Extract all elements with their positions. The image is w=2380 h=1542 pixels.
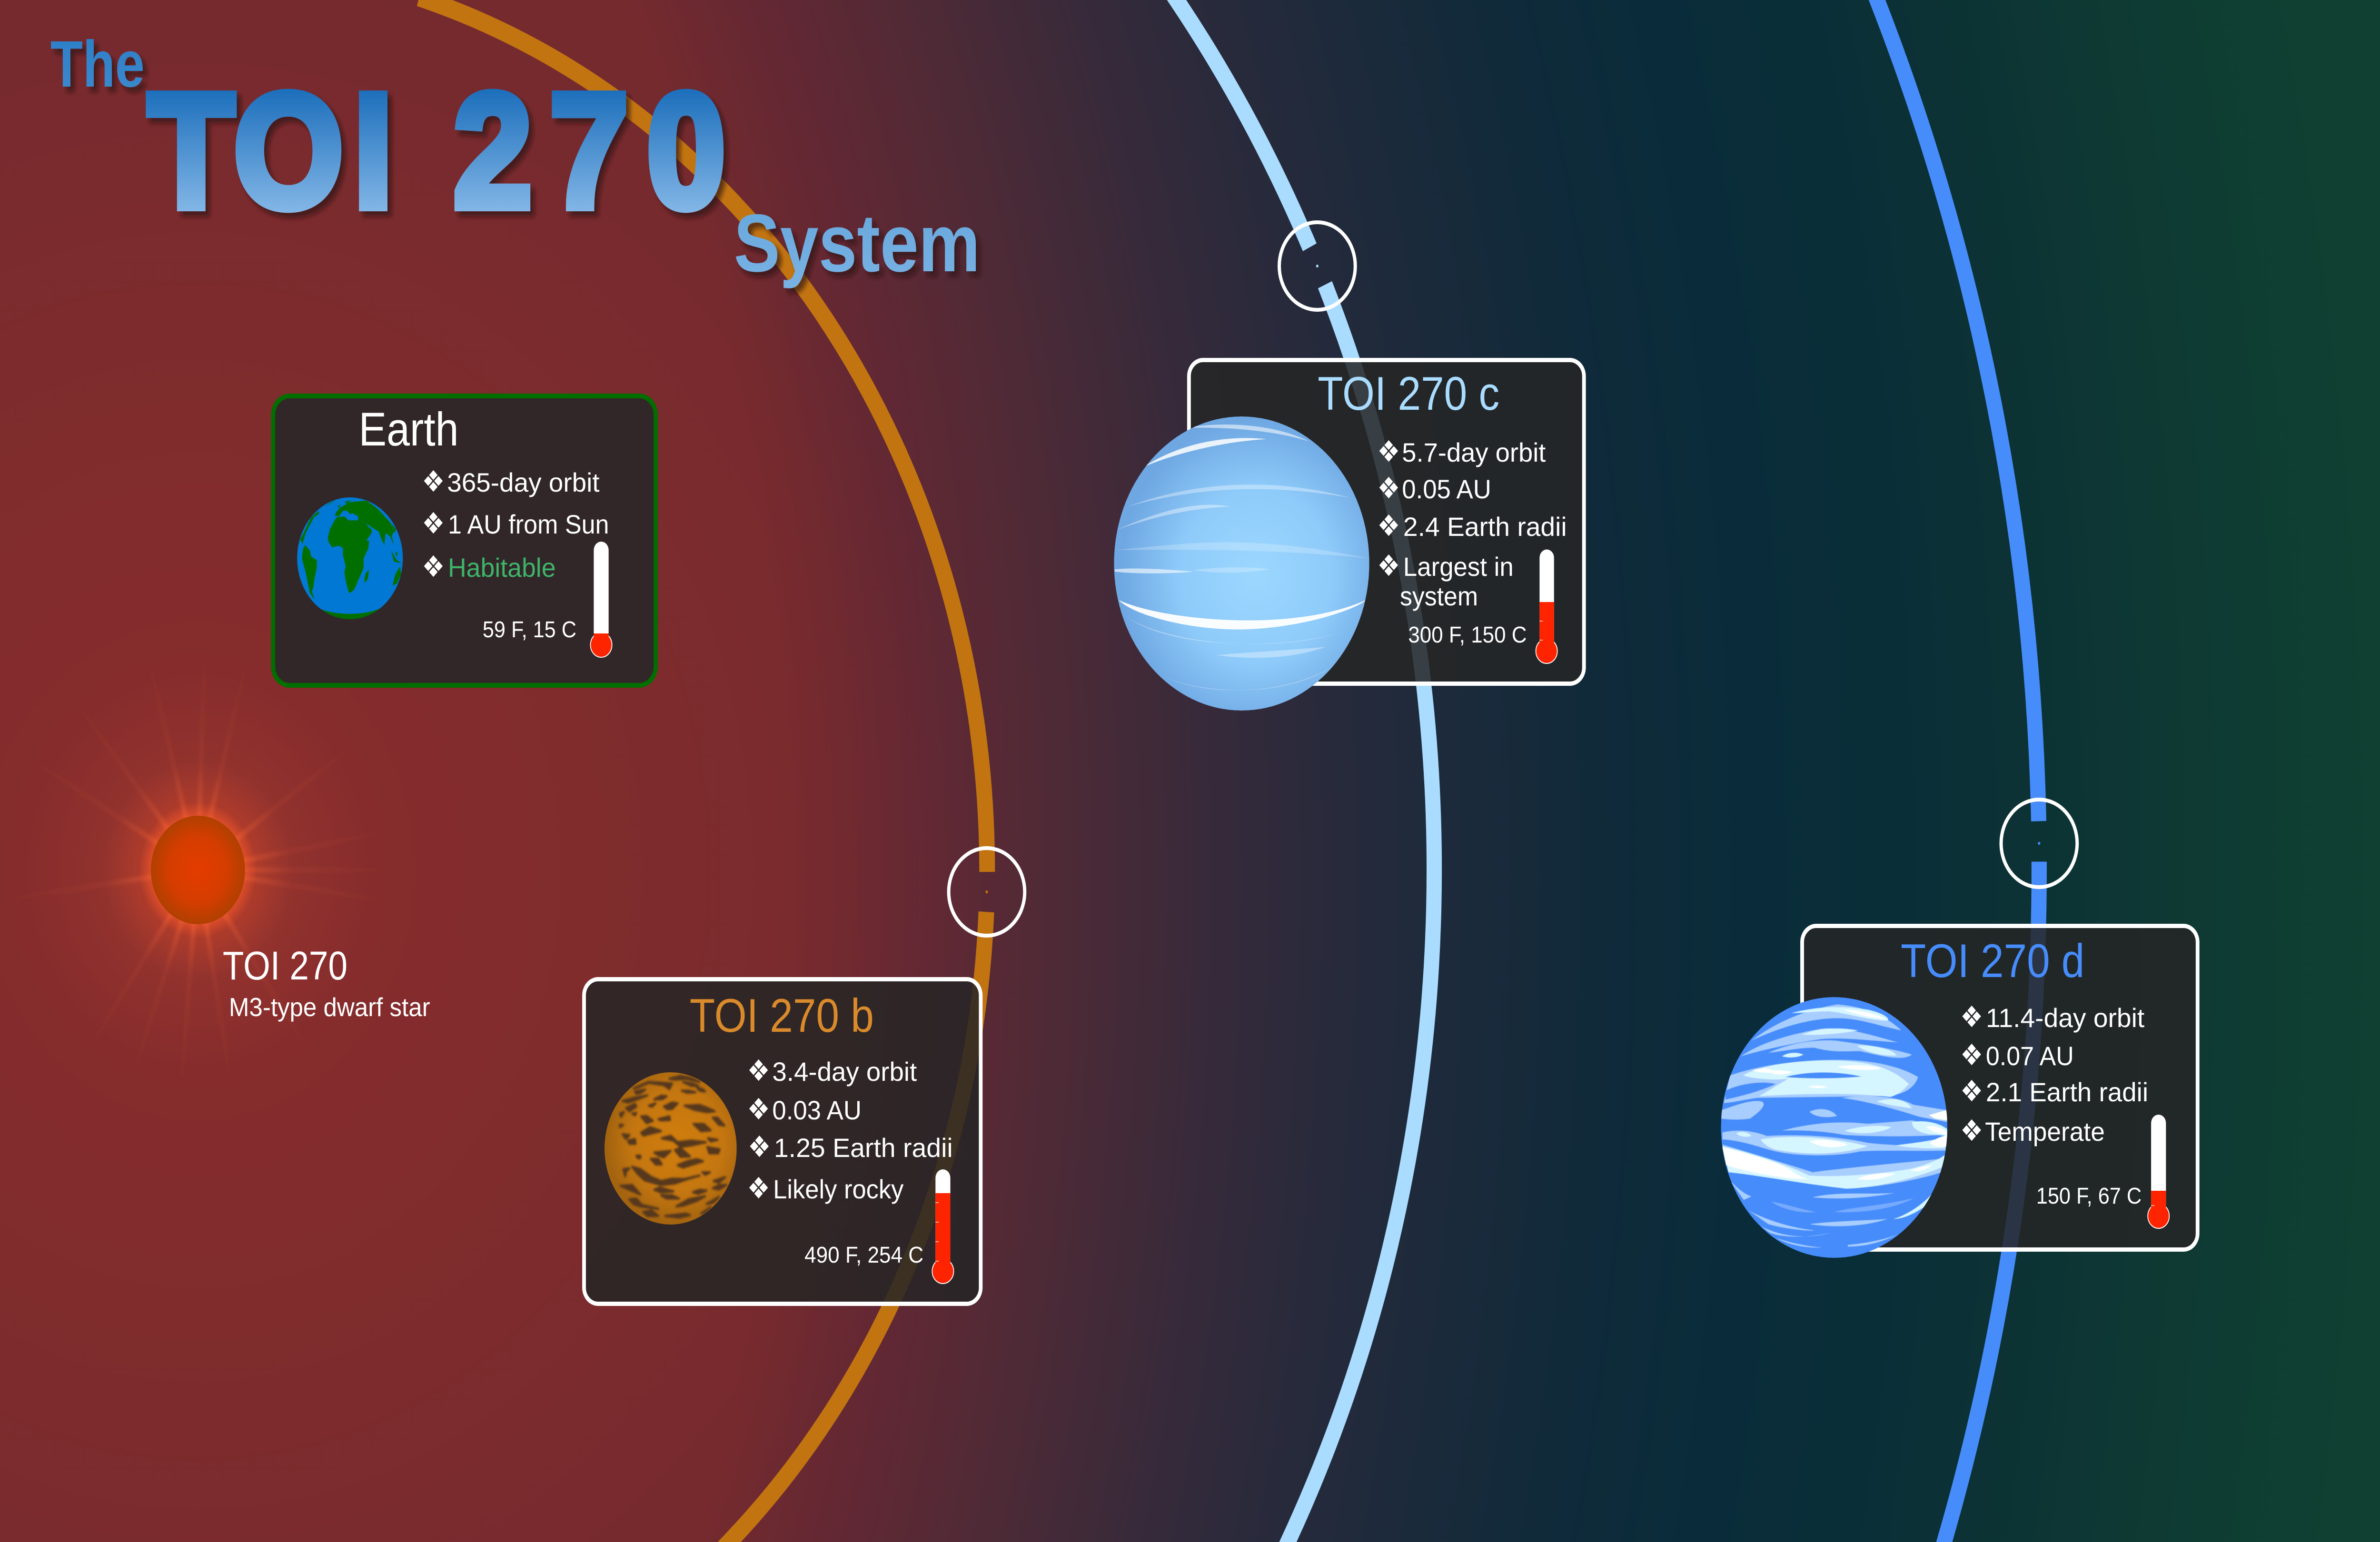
facts b: 1.25 Earth radii [774,1134,953,1163]
orbit: TOI 270 d [1877,0,2039,1542]
heading c: TOI 270 c [1318,367,1499,420]
facts b: ❖ [747,1092,770,1127]
planet b dark patches [620,1076,726,1217]
facts c: ❖ [1377,434,1400,469]
planet d surface [1721,997,1947,1258]
icon: thermometer c [1536,549,1557,663]
Earth card [273,396,656,685]
Earth facts: 365-day orbit [447,468,600,498]
facts d: Temperate [1985,1117,2105,1147]
facts c: Largest in [1403,553,1514,582]
star glow [24,670,371,1070]
icon: thermometer b [932,1169,953,1284]
facts d: ❖ [1960,1074,1983,1108]
star type: M3-type dwarf star [229,992,430,1022]
title [50,28,980,289]
facts c: 5.7-day orbit [1402,438,1546,468]
title word: System: System [734,198,980,289]
facts d: ❖ [1960,1038,1983,1072]
heading d: TOI 270 d [1901,934,2084,987]
planet c [1114,416,1369,711]
panel: TOI 270 c [1114,360,1584,711]
facts d [1960,999,2148,1148]
background warm glow [0,0,983,1542]
planet b [605,1072,737,1225]
planet d cloud bands [1721,1004,1947,1247]
icon: Earth globe [297,497,403,622]
icon: thermometer d [2148,1115,2169,1228]
Earth facts [422,464,609,584]
facts c: system [1400,582,1478,612]
facts d: 2.1 Earth radii [1986,1078,2148,1107]
Earth temperature: 59 F, 15 C [483,616,576,642]
icon: thermometer Earth [590,542,612,657]
facts d: ❖ [1960,1113,1983,1148]
Earth heading: Earth [358,403,459,455]
title word: TOI 270: TOI 270 [149,60,725,241]
marker: planet d position [2001,800,2077,887]
facts b: 0.03 AU [772,1096,862,1126]
temperature d: 150 F, 67 C [2036,1183,2142,1209]
Earth facts: 1 AU from Sun [448,510,609,540]
facts b: Likely rocky [773,1175,904,1205]
facts b [747,1053,953,1206]
heading b: TOI 270 b [690,989,874,1042]
facts b: ❖ [748,1129,771,1164]
planet c surface [1114,416,1369,711]
marker: planet b position [949,848,1025,936]
facts c: ❖ [1377,508,1400,543]
facts c: 0.05 AU [1402,475,1491,504]
Earth facts: ❖ [422,549,445,584]
facts c: ❖ [1377,471,1400,505]
facts d: ❖ [1960,999,1983,1034]
facts d: 0.07 AU [1986,1042,2074,1071]
star name: TOI 270 [223,943,347,988]
facts b: ❖ [747,1171,770,1206]
star rays [4,632,405,1107]
ocean [297,497,403,619]
star: TOI 270 [4,632,405,1107]
orbit: TOI 270 c [1177,0,1434,1542]
Earth facts: Habitable [448,554,556,583]
planet b surface [605,1072,737,1225]
marker: planet c position [1279,222,1355,310]
orbit: TOI 270 b [426,0,987,1542]
planet d [1721,997,1947,1258]
Earth facts: ❖ [422,506,445,541]
temperature b: 490 F, 254 C [804,1242,923,1268]
planet c cloud streaks [1115,425,1368,690]
panel: TOI 270 b [584,979,981,1304]
card c [1189,360,1584,683]
card d [1802,926,2198,1250]
continents [300,500,401,622]
facts d: 11.4-day orbit [1986,1004,2145,1033]
star disc [151,816,245,924]
facts c: 2.4 Earth radii [1403,513,1567,542]
temperature c: 300 F, 150 C [1408,622,1527,648]
facts c: ❖ [1377,548,1400,583]
panel: TOI 270 d [1721,926,2198,1258]
facts b: 3.4-day orbit [772,1058,917,1087]
title word: The: The [50,28,145,101]
facts c [1377,434,1567,612]
facts b: ❖ [747,1053,770,1088]
card b [584,979,981,1304]
panel: Earth [273,396,656,685]
Earth facts: ❖ [422,464,445,499]
